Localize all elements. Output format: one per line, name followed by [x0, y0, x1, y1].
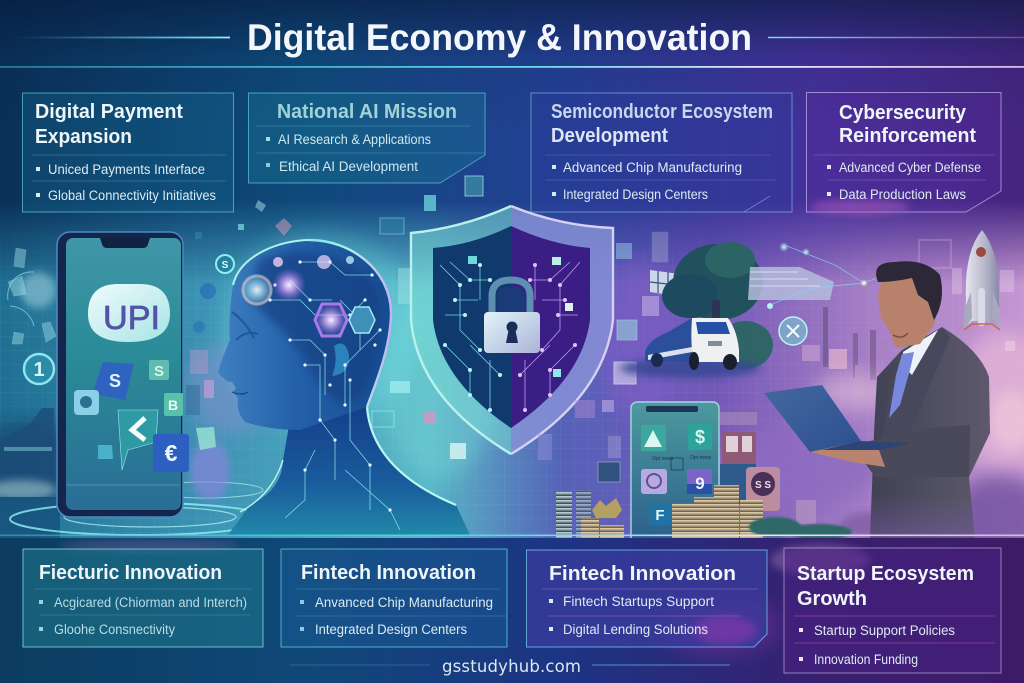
panel: Fintech Innovation (startups): Fintech Innovation: [549, 563, 736, 585]
fintech phone: Opt news: [652, 456, 674, 462]
security shield: [411, 206, 613, 454]
rocket: [964, 230, 1000, 330]
panel: Cybersecurity Reinforcement: Reinforcement: [839, 125, 976, 147]
panel: Fintech Innovation (startups): Fintech Startups Support: [563, 594, 714, 609]
car: [645, 318, 739, 370]
panel: Fintech Innovation (startups): Digital Lending Solutions: [563, 622, 708, 637]
panel: Digital Payment Expansion: Global Connectivity Initiatives: [48, 188, 216, 203]
panel: Fiecturic Innovation: [23, 549, 263, 647]
floating glass icons, left: [8, 176, 483, 459]
data squares, centre right: [538, 232, 702, 482]
panel: Digital Payment Expansion: Digital Payment: [35, 101, 183, 123]
laptop: [764, 385, 912, 452]
left cityscape silhouette: [0, 408, 60, 540]
panel: Fintech Innovation (chip): Integrated Design Centers: [315, 622, 467, 637]
fintech phone: 9: [695, 474, 705, 493]
payment app tiles: B: [168, 397, 178, 413]
panel: Semiconductor Ecosystem Development: Advanced Chip Manufacturing: [563, 160, 742, 175]
panel: Cybersecurity Reinforcement: Cybersecurity: [839, 102, 967, 124]
fintech phone: F: [655, 507, 665, 524]
holographic rings under phone: [10, 440, 270, 535]
panel: Startup Ecosystem Growth: Startup Ecosystem: [797, 563, 974, 585]
panel: National AI Mission: National AI Mission: [277, 101, 457, 123]
floating glass icons, left: S: [222, 260, 229, 271]
suit: [852, 327, 990, 540]
padlock: [484, 280, 540, 353]
panel: Digital Payment Expansion: [22, 93, 234, 212]
clouds right: [815, 374, 1024, 555]
bank building behind phone: S S: [755, 480, 771, 491]
panel: Startup Ecosystem Growth: Startup Support Policies: [814, 623, 955, 638]
title: Digital Economy & Innovation: [247, 17, 752, 58]
payment app tiles: €: [165, 440, 178, 466]
bank building behind phone: [720, 412, 816, 524]
panel: Fiecturic Innovation: Fiecturic Innovation: [39, 562, 222, 584]
panel: National AI Mission: Ethical AI Development: [279, 159, 418, 174]
coin stacks: [556, 485, 852, 540]
panel: Cybersecurity Reinforcement: [806, 92, 1001, 215]
constellation lines: [767, 242, 910, 345]
fintech phone: [631, 402, 719, 542]
circuit traces in brain: [270, 262, 400, 530]
businessman with laptop: [764, 261, 990, 540]
panel: Semiconductor Ecosystem Development: [531, 93, 792, 212]
AI head: [218, 230, 470, 535]
panel: Fiecturic Innovation: Acgicared (Chiorman and Interch): [54, 595, 247, 610]
UPI badge: UPI: [103, 299, 160, 336]
footer website: gsstudyhub.com: [442, 657, 581, 676]
panel: Semiconductor Ecosystem Development: Integrated Design Centers: [563, 187, 708, 202]
panel: Cybersecurity Reinforcement: Data Production Laws: [839, 187, 966, 202]
payment app tiles: [74, 360, 216, 472]
illustrated scene backdrop: [0, 200, 1024, 540]
panel: Semiconductor Ecosystem Development: Development: [551, 125, 668, 147]
panel: National AI Mission: AI Research & Applications: [278, 132, 431, 147]
panel: Startup Ecosystem Growth: Growth: [797, 588, 867, 610]
payment app tiles: S: [154, 363, 164, 380]
UPI badge: [88, 284, 170, 342]
phone with UPI: [57, 232, 216, 517]
divider lines above bottom band: [0, 534, 1024, 683]
floating glass icons, left: 1: [33, 359, 45, 381]
background: header band: [0, 0, 1024, 300]
panel: Fiecturic Innovation: Gloohe Consnectivity: [54, 622, 175, 637]
hands: [810, 445, 885, 467]
distant skyline and envelopes: [802, 240, 1015, 395]
panel: Fintech Innovation (chip): Anvanced Chip Manufacturing: [315, 595, 493, 610]
head: [876, 261, 942, 348]
panel: Fintech Innovation (startups): [526, 550, 767, 647]
fintech phone: $: [695, 427, 705, 447]
panel: Semiconductor Ecosystem Development: Semiconductor Ecosystem: [551, 101, 773, 123]
panel: Cybersecurity Reinforcement: Advanced Cyber Defense: [839, 160, 981, 175]
panel: Startup Ecosystem Growth: Innovation Funding: [814, 652, 918, 667]
panel: Startup Ecosystem Growth: [784, 548, 1001, 673]
panel: Digital Payment Expansion: Uniced Payments Interface: [48, 162, 205, 177]
payment app tiles: S: [109, 371, 121, 391]
panel: National AI Mission: [248, 93, 485, 183]
tree and building: [620, 242, 834, 378]
panel: Digital Payment Expansion: Expansion: [35, 126, 132, 148]
panel: Fintech Innovation (chip): Fintech Innovation: [301, 562, 476, 584]
panel: Fintech Innovation (chip): [281, 549, 507, 647]
fintech phone: Opt news: [690, 455, 712, 461]
